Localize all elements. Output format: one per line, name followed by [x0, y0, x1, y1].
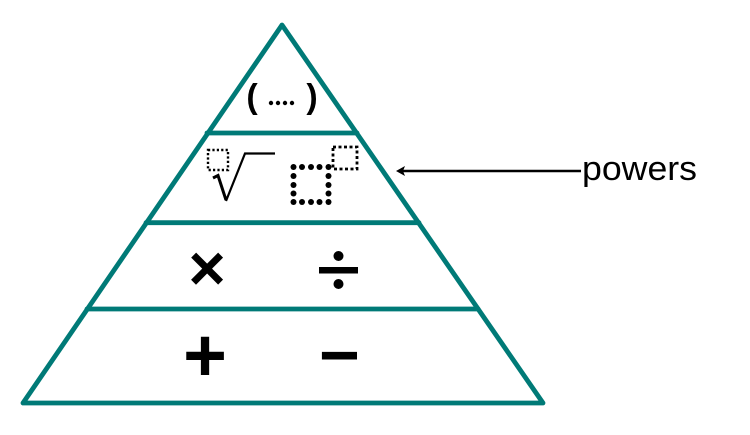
icon: root with dotted index box — [208, 150, 275, 201]
arrow pointing to powers tier — [396, 166, 581, 176]
pyramid outline with tiers — [23, 25, 543, 403]
tier 4: plus symbol: + — [183, 313, 227, 397]
tier 1: brackets: ( — [246, 78, 258, 116]
tier 1: brackets: ) — [306, 78, 318, 116]
tier 1: brackets — [246, 78, 318, 116]
label: powers: powers — [582, 150, 697, 188]
tier 4: minus symbol: − — [319, 316, 360, 394]
tier 3: divide symbol — [319, 251, 358, 289]
tier 3: multiply symbol: × — [188, 232, 226, 304]
icon: dotted square with dotted exponent box — [290, 147, 357, 205]
tier 2: roots and powers — [208, 147, 357, 205]
